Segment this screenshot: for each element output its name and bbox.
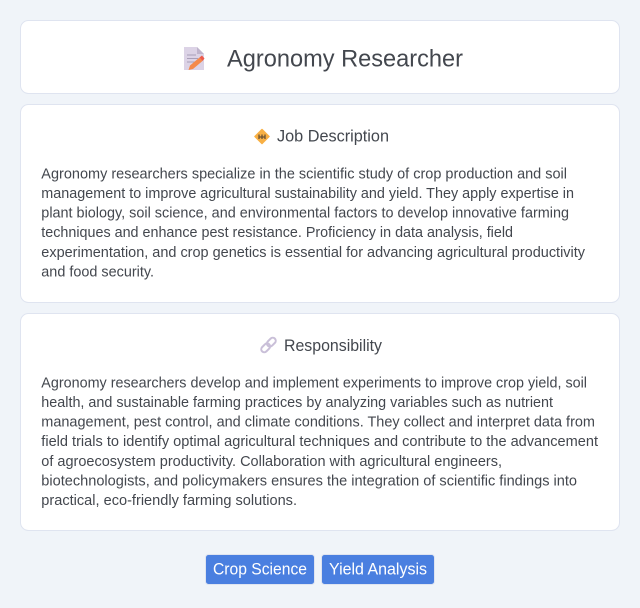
tag: Crop Science: Crop Science	[213, 560, 307, 578]
text block: job description: management to improve agricultural sustainability and yield. They apply expertise in	[41, 186, 574, 202]
heading: responsibility: Responsibility	[284, 337, 383, 355]
panel: responsibility	[20, 314, 620, 530]
text block: responsibility: field trials to identify optimal agricultural techniques and contribute to the advancement	[41, 434, 598, 450]
text block: responsibility: of agroecosystem productivity. Collaboration with agricultural engineers,	[41, 454, 502, 470]
panel: job description	[20, 104, 620, 302]
title: Agronomy Researcher	[227, 46, 463, 72]
text block: job description: experimentation, and crop genetics is essential for advancing agricultural productivity	[41, 245, 586, 261]
text block: responsibility: management, pest control, and climate conditions. They collect and interpret data from	[41, 415, 595, 431]
tag: Yield Analysis: Yield Analysis	[329, 560, 427, 578]
text block: responsibility	[41, 376, 598, 509]
text block: responsibility: health, and sustainable farming practices by analyzing variables such as nutrient	[41, 395, 553, 411]
icon: document with pencil	[184, 47, 204, 70]
text block: responsibility: practical, eco-friendly farming solutions.	[41, 493, 297, 509]
icon: orange diamond sign	[255, 130, 269, 144]
text block: job description: and food security.	[41, 264, 154, 280]
text block: job description	[41, 166, 586, 280]
text block: job description: plant biology, soil science, and environmental factors to develop innovative farming	[41, 206, 569, 222]
panel: header	[20, 20, 620, 94]
text block: responsibility: Agronomy researchers develop and implement experiments to improve crop yield, soil	[41, 376, 587, 392]
tag: Yield Analysis	[322, 554, 434, 584]
heading: job description: Job Description	[277, 128, 389, 146]
text block: responsibility: biotechnologists, and policymakers ensures the integration of scientific findings into	[41, 473, 577, 489]
text block: job description: Agronomy researchers specialize in the scientific study of crop production and soil	[41, 166, 567, 182]
tag: Crop Science	[206, 554, 314, 584]
icon: chain link	[260, 337, 277, 353]
text block: job description: techniques and enhance pest resistance. Proficiency in data analysis, field	[41, 225, 513, 241]
